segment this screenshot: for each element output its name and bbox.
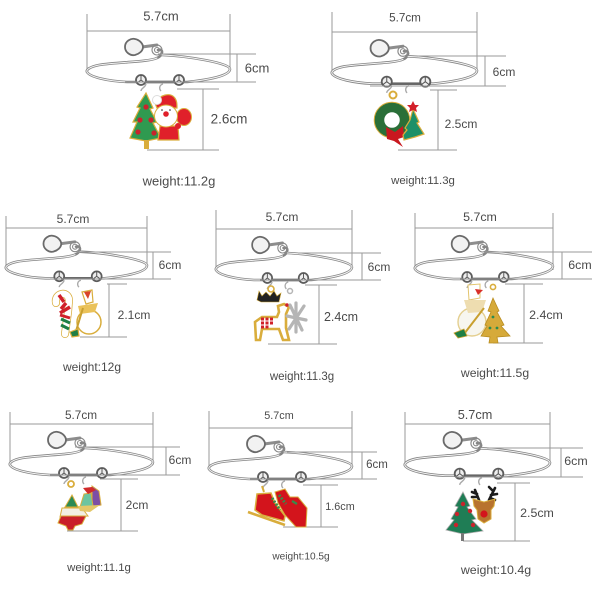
icon: snowman charm — [454, 284, 486, 338]
width dimension lines — [10, 412, 153, 465]
icon: reindeer charm — [472, 487, 497, 523]
bangle height label: 6cm — [159, 258, 181, 272]
bangle height label: 6cm — [564, 454, 588, 468]
bangle — [10, 432, 153, 484]
weight label: weight:11.5g — [460, 366, 529, 380]
width dimension lines — [6, 216, 147, 266]
bangle height dimension — [260, 253, 381, 280]
charm height label: 2.5cm — [445, 117, 477, 131]
weight label: weight:11.3g — [390, 175, 455, 187]
bangle height dimension — [455, 448, 583, 477]
width label: 5.7cm — [458, 408, 492, 422]
width dimension lines — [216, 210, 352, 268]
bangle — [209, 436, 352, 488]
icon: dress charm — [58, 481, 88, 530]
icon: small tree charm — [403, 101, 424, 140]
charm height label: 2.6cm — [211, 112, 247, 126]
bangle — [405, 432, 550, 485]
width label: 5.7cm — [266, 210, 298, 224]
charm height label: 2.4cm — [529, 308, 563, 322]
icon: Christmas tree charm — [446, 492, 483, 541]
width dimension lines — [87, 14, 230, 70]
bangle — [216, 237, 352, 289]
icon: snowman charm — [70, 290, 101, 337]
icon: candy cane charm — [56, 294, 70, 334]
bangle height dimension — [250, 452, 377, 479]
weight label: weight:10.5g — [271, 552, 330, 562]
weight label: weight:11.3g — [269, 371, 334, 383]
charm height label: 2.5cm — [520, 506, 554, 520]
charm height dimension — [283, 485, 338, 527]
bangle height label: 6cm — [245, 60, 269, 76]
icon: gold tree charm — [481, 284, 510, 343]
panel: skates and mitten bracelet — [209, 410, 388, 562]
icon: mitten charm — [275, 489, 307, 527]
charm height label: 2.1cm — [118, 308, 150, 322]
panel: reindeer and snowflake bracelet — [216, 210, 390, 383]
bangle height label: 6cm — [568, 258, 592, 272]
charm height dimension — [147, 89, 219, 150]
panel: candy cane and snowman bracelet — [6, 212, 181, 374]
charm height label: 2cm — [126, 498, 148, 512]
width label: 5.7cm — [463, 210, 497, 224]
bangle height dimension — [460, 252, 592, 279]
width dimension lines — [209, 411, 352, 468]
weight label: weight:12g — [62, 360, 121, 374]
weight label: weight:11.2g — [142, 174, 215, 188]
weight label: weight:10.4g — [460, 563, 531, 577]
bangle — [332, 40, 477, 93]
weight label: weight:11.1g — [66, 562, 131, 574]
width label: 5.7cm — [65, 408, 97, 422]
charm height label: 2.4cm — [324, 310, 358, 324]
icon: wreath charm — [374, 92, 410, 147]
charm height dimension — [80, 284, 127, 337]
bangle height dimension — [370, 56, 506, 86]
charm height dimension — [398, 90, 457, 150]
bangle height dimension — [50, 447, 180, 475]
panel: tree and reindeer bracelet — [405, 408, 588, 577]
icon: snowflake charm — [287, 288, 306, 332]
bangle height label: 6cm — [368, 260, 390, 274]
bangle height label: 6cm — [493, 65, 515, 79]
width label: 5.7cm — [143, 8, 179, 24]
bangle — [415, 236, 553, 288]
panel: snowman and gold tree bracelet — [415, 210, 592, 380]
panel: dress and bells bracelet — [10, 408, 191, 574]
width dimension lines — [415, 213, 553, 270]
bangle height label: 6cm — [169, 453, 191, 467]
bangle height label: 6cm — [366, 459, 388, 471]
panel: wreath and tree bracelet — [332, 12, 515, 187]
width label: 5.7cm — [264, 410, 294, 422]
width dimension lines — [405, 412, 550, 462]
icon: skate charm — [248, 486, 285, 525]
width dimension lines — [332, 12, 477, 70]
width label: 5.7cm — [389, 12, 421, 24]
charm height label: 1.6cm — [325, 501, 355, 513]
charm height dimension — [493, 284, 543, 343]
icon: reindeer charm — [255, 286, 289, 340]
icon: Santa charm — [152, 95, 192, 140]
bangle — [6, 236, 147, 287]
charm height dimension — [67, 479, 138, 531]
charm height dimension — [463, 483, 530, 541]
width label: 5.7cm — [57, 212, 89, 226]
bangle height dimension — [125, 54, 256, 82]
panel: tree and Santa bracelet — [87, 8, 269, 188]
bangle — [87, 39, 230, 91]
icon: bells charm — [78, 486, 101, 512]
bangle height dimension — [50, 252, 171, 279]
icon: Christmas tree charm — [130, 93, 161, 149]
charm height dimension — [268, 285, 337, 344]
